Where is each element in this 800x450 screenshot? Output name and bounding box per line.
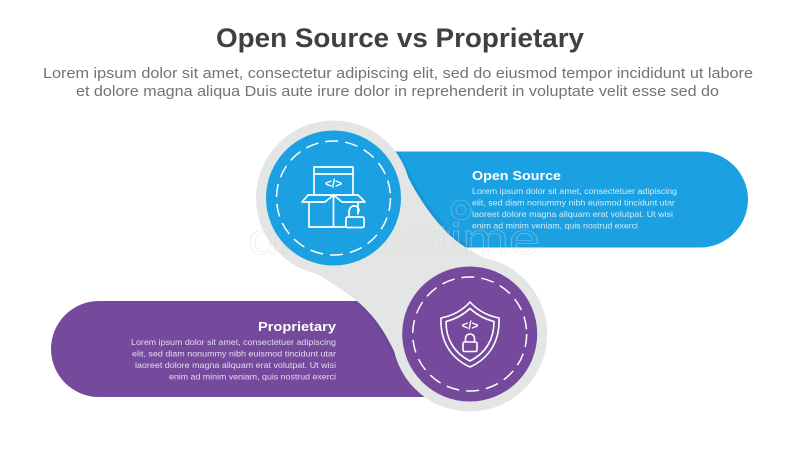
text block: open source: laoreet dolore magna aliquam erat volutpat. Ut wisi: [472, 209, 673, 219]
text block: proprietary: enim ad minim veniam, quis nostrud exerci: [169, 372, 336, 382]
text block: proprietary: [131, 319, 337, 382]
subtitle text: [43, 66, 753, 100]
icon: shield with code and lock: [441, 302, 499, 367]
text block: open source: enim ad minim veniam, quis nostrud exerci: [472, 220, 638, 230]
icon: box with code window and open lock: </>: [325, 176, 342, 190]
icon: box with code window and open lock: [302, 167, 365, 228]
circle: open source: [266, 130, 401, 266]
panel: open source bar: [395, 152, 748, 248]
grey connector shape: [256, 120, 547, 412]
bar edge shadow: [352, 152, 472, 397]
text block: open source: Open Source: [472, 168, 561, 183]
text block: proprietary: Lorem ipsum dolor sit amet, consectetuer adipiscing: [131, 337, 336, 347]
watermark: dreamstime: [248, 215, 540, 264]
icon: shield with code and lock: </>: [462, 320, 479, 332]
text block: open source: elit, sed diam nonummy nibh euismod tincidunt utar: [472, 198, 675, 208]
watermark: [248, 200, 540, 264]
subtitle text: Lorem ipsum dolor sit amet, consectetur adipiscing elit, sed do eiusmod tempor incididunt ut labore: [43, 66, 753, 82]
text block: proprietary: laoreet dolore magna aliquam erat volutpat. Ut wisi: [135, 360, 336, 370]
text block: proprietary: Proprietary: [258, 319, 337, 334]
circle: proprietary: [402, 266, 537, 402]
panel: proprietary bar: [51, 301, 440, 397]
title: Open Source vs Proprietary: [216, 23, 584, 53]
text block: open source: Lorem ipsum dolor sit amet, consectetuer adipiscing: [472, 186, 677, 196]
text block: proprietary: elit, sed diam nonummy nibh euismod tincidunt utar: [132, 348, 336, 358]
text block: open source: [472, 168, 677, 230]
subtitle text: et dolore magna aliqua Duis aute irure dolor in reprehenderit in voluptate velit esse sed do: [76, 84, 719, 100]
